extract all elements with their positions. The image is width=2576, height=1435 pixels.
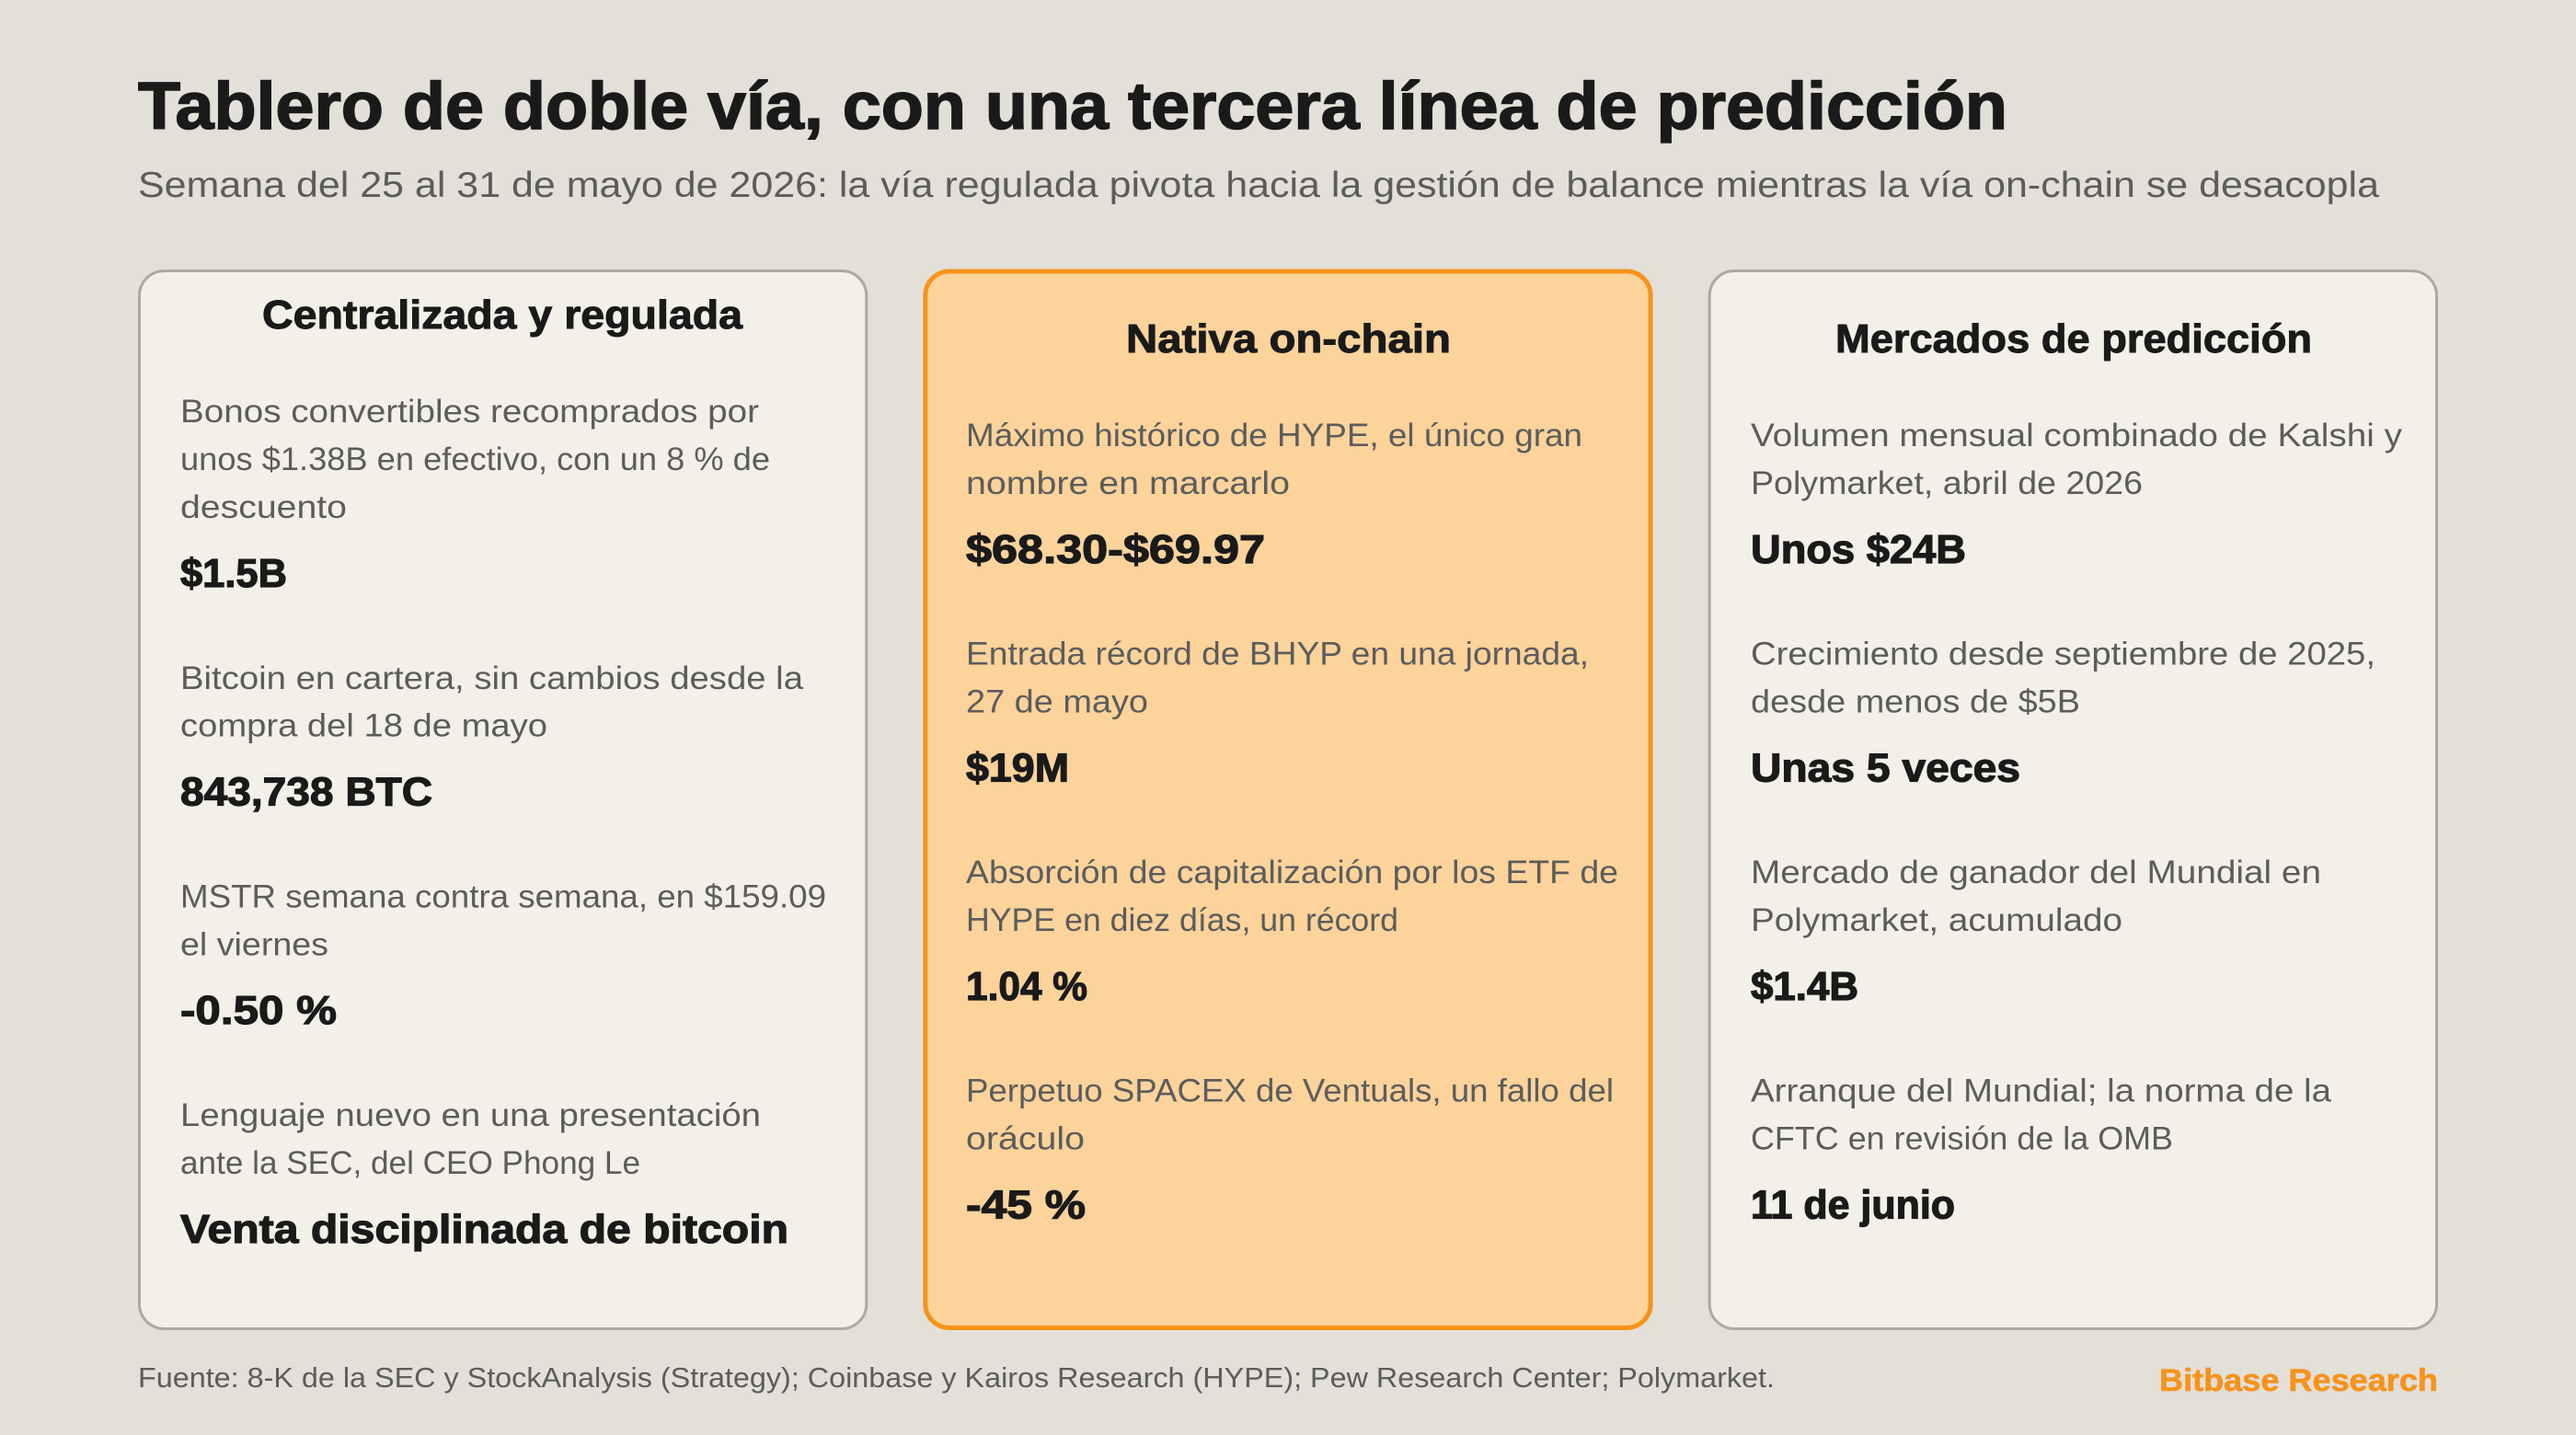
metric: bonos convertibles: [180, 394, 770, 596]
metric: bonos convertibles: Bonos convertibles recomprados por: [180, 394, 759, 430]
metric: crecimiento: desde menos de $5B: [1751, 684, 2080, 719]
metric: entrada BHYP: $19M: [966, 745, 1069, 791]
metric: lenguaje nuevo SEC: Venta disciplinada de bitcoin: [180, 1207, 788, 1252]
metric: bonos convertibles: descuento: [180, 489, 347, 525]
metric: perpetuo SPACEX: -45 %: [966, 1183, 1086, 1227]
metric: MSTR semanal: -0.50 %: [180, 988, 337, 1033]
metric: volumen mensual: [1751, 418, 2403, 572]
title: Tablero de doble vía, con una tercera línea de predicción: [138, 70, 2007, 144]
metric: bitcoin en cartera: compra del 18 de mayo: [180, 708, 547, 743]
metric: volumen mensual: Polymarket, abril de 2026: [1751, 465, 2143, 501]
metric: entrada BHYP: 27 de mayo: [966, 684, 1148, 719]
metric: arranque del Mundial: Arranque del Mundial; la norma de la: [1751, 1073, 2332, 1109]
metric: volumen mensual: Volumen mensual combinado de Kalshi y: [1751, 418, 2403, 453]
metric: lenguaje nuevo SEC: Lenguaje nuevo en una presentación: [180, 1097, 761, 1133]
panel: nativa on-chain: [926, 271, 1650, 1328]
metric: arranque del Mundial: CFTC en revisión de la OMB: [1751, 1120, 2173, 1157]
metric: bitcoin en cartera: 843,738 BTC: [180, 769, 432, 815]
metric: arranque del Mundial: 11 de junio: [1751, 1183, 1955, 1227]
metric: bonos convertibles: unos $1.38B en efectivo, con un 8 % de: [180, 442, 770, 477]
metric: absorción ETF: [966, 855, 1618, 1009]
metric: máximo de HYPE: $68.30-$69.97: [966, 527, 1265, 572]
metric: bitcoin en cartera: Bitcoin en cartera, sin cambios desde la: [180, 660, 804, 696]
metric: entrada BHYP: [966, 637, 1589, 791]
source note: Fuente: 8-K de la SEC y StockAnalysis (Strategy); Coinbase y Kairos Research (HYPE); Pew Research Center; Polymarket.: [138, 1361, 1775, 1394]
metric: máximo de HYPE: Máximo histórico de HYPE, el único gran: [966, 418, 1582, 453]
brand label: Bitbase Research: [2159, 1363, 2438, 1398]
metric: MSTR semanal: MSTR semana contra semana, en $159.09: [180, 879, 826, 914]
metric: volumen mensual: Unos $24B: [1751, 527, 1966, 572]
metric: absorción ETF: Absorción de capitalización por los ETF de: [966, 855, 1618, 890]
metric: mercado del Mundial: [1751, 855, 2321, 1009]
metric: arranque del Mundial: [1751, 1073, 2332, 1227]
metric: crecimiento: Crecimiento desde septiembre de 2025,: [1751, 637, 2375, 672]
metric: crecimiento: Unas 5 veces: [1751, 745, 2020, 791]
metric: perpetuo SPACEX: [966, 1073, 1614, 1227]
metric: máximo de HYPE: [966, 418, 1582, 572]
metric: lenguaje nuevo SEC: ante la SEC, del CEO Phong Le: [180, 1145, 640, 1181]
metric: absorción ETF: HYPE en diez días, un récord: [966, 902, 1398, 938]
metric: bonos convertibles: $1.5B: [180, 551, 287, 596]
panel: centralizada y regulada: [140, 270, 867, 1328]
metric: entrada BHYP: Entrada récord de BHYP en una jornada,: [966, 637, 1589, 672]
metric: bitcoin en cartera: [180, 660, 804, 815]
heading: mercados de predicción: Mercados de predicción: [1835, 316, 2312, 362]
metric: MSTR semanal: el viernes: [180, 927, 328, 962]
heading: nativa on-chain: Nativa on-chain: [1126, 316, 1451, 362]
metric: mercado del Mundial: $1.4B: [1751, 964, 1858, 1009]
metric: perpetuo SPACEX: oráculo: [966, 1120, 1085, 1157]
metric: perpetuo SPACEX: Perpetuo SPACEX de Ventuals, un fallo del: [966, 1073, 1614, 1109]
metric: máximo de HYPE: nombre en marcarlo: [966, 465, 1290, 501]
panel: mercados de predicción: [1709, 270, 2436, 1328]
subtitle: Semana del 25 al 31 de mayo de 2026: la vía regulada pivota hacia la gestión de balance mientras la vía on-chain se desacopla: [138, 166, 2379, 205]
metric: lenguaje nuevo SEC: [180, 1097, 788, 1252]
metric: mercado del Mundial: Polymarket, acumulado: [1751, 902, 2122, 938]
metric: MSTR semanal: [180, 879, 826, 1033]
heading: centralizada y regulada: Centralizada y regulada: [262, 293, 743, 338]
metric: mercado del Mundial: Mercado de ganador del Mundial en: [1751, 855, 2321, 890]
metric: crecimiento: [1751, 637, 2375, 791]
metric: absorción ETF: 1.04 %: [966, 964, 1087, 1009]
